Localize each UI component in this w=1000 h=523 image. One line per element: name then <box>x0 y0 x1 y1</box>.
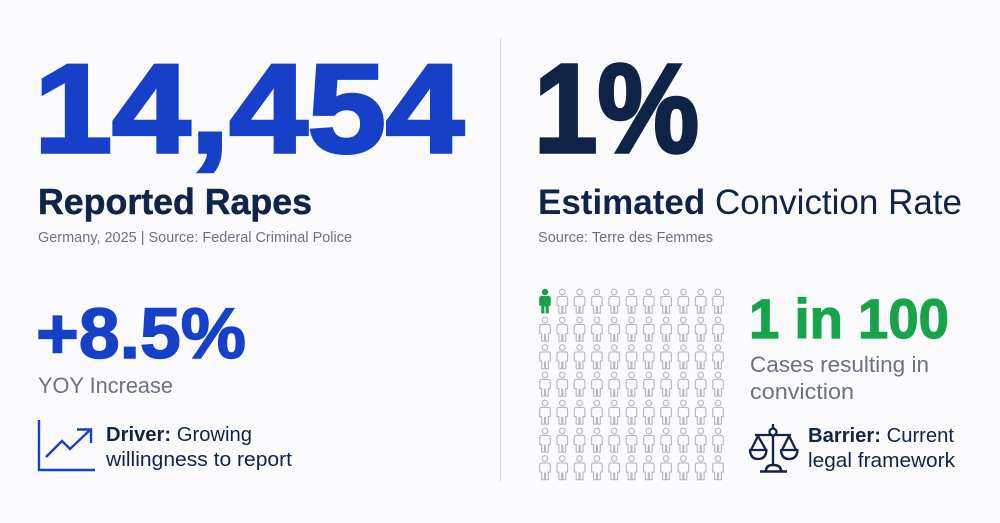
icon: highlighted green person <box>538 288 552 315</box>
driver text: Driver: Growing <box>106 424 252 446</box>
big number: 1%: 1% <box>534 38 699 179</box>
label: yoy increase: YOY Increase <box>38 373 173 398</box>
stat: 1 in 100: 1 in 100 <box>749 287 949 350</box>
icon: rising trend chart <box>39 420 95 470</box>
panel: reported rapes <box>34 38 464 471</box>
source: terre des femmes: Source: Terre des Femmes <box>538 230 713 246</box>
panel: conviction rate <box>534 38 962 480</box>
label: cases resulting in conviction: Cases resulting in <box>750 352 929 377</box>
driver text <box>105 424 292 471</box>
barrier text: Barrier: Current <box>808 425 954 447</box>
barrier text: legal framework <box>808 450 956 472</box>
pictogram: 1 in 100 people <box>538 288 723 480</box>
driver text: willingness to report <box>105 449 292 471</box>
icon: scales of justice <box>750 424 798 472</box>
label: cases resulting in conviction: conviction <box>750 379 854 404</box>
stat: year over year increase: +8.5% <box>36 295 246 374</box>
source: federal criminal police: Germany, 2025 | Source: Federal Criminal Police <box>38 230 352 246</box>
heading: estimated conviction rate: Estimated Conviction Rate <box>538 183 962 222</box>
label: cases resulting in conviction <box>750 352 929 404</box>
heading: reported rapes: Reported Rapes <box>38 181 312 222</box>
barrier text <box>808 425 956 472</box>
big number: 14,454: 14,454 <box>34 38 464 179</box>
